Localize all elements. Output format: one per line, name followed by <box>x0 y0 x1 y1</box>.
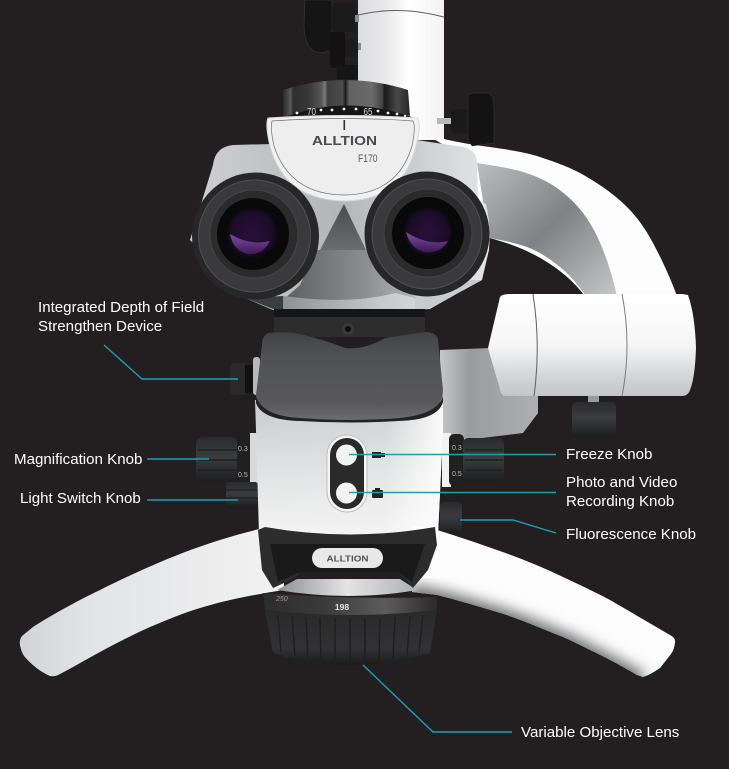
lower centre shading <box>283 250 420 300</box>
right magnification knob: 0.5 <box>452 471 462 478</box>
lens seat disc <box>277 579 417 596</box>
right magnification knob <box>442 433 504 487</box>
head foot <box>283 293 415 311</box>
clamp badge <box>312 548 383 568</box>
camera icon <box>372 488 383 498</box>
centre wedge <box>320 204 366 250</box>
curved arm <box>430 137 677 296</box>
callout: Magnification Knob: Magnification Knob <box>14 451 142 468</box>
rotating dial: 65 <box>364 107 373 118</box>
callout: Variable Objective Lens <box>363 665 679 741</box>
callout: Freeze Knob: Freeze Knob <box>566 446 652 463</box>
callout: Variable Objective Lens: Variable Objective Lens <box>521 724 679 741</box>
depth of field knob <box>230 357 260 395</box>
button capsule <box>327 435 367 512</box>
freeze icon <box>372 452 385 458</box>
callout: Photo and Video Recording Knob <box>349 474 677 510</box>
left magnification knob: 0.3 <box>238 446 248 453</box>
left shadow foot <box>245 296 283 309</box>
objective lens <box>263 593 437 665</box>
upper arm column <box>358 0 444 140</box>
callout: Fluorescence Knob: Fluorescence Knob <box>566 526 696 543</box>
clamp badge: ALLTION <box>326 554 369 564</box>
right magnification knob: 0.3 <box>452 445 462 452</box>
inner shaded face <box>477 163 617 296</box>
freeze button <box>336 444 357 466</box>
label plate: ALLTION <box>312 134 377 148</box>
right eyepiece <box>364 172 490 296</box>
binocular head housing <box>190 140 490 311</box>
label plate <box>267 116 419 201</box>
right foot <box>415 280 482 310</box>
callout: Integrated Depth of Field Strengthen Device: Strengthen Device <box>38 318 162 335</box>
callout: Integrated Depth of Field Strengthen Device: Integrated Depth of Field <box>38 299 204 316</box>
rotating dial <box>281 80 417 119</box>
left eyepiece <box>192 172 319 300</box>
callout: Integrated Depth of Field Strengthen Device <box>38 299 238 379</box>
callout: Fluorescence Knob <box>460 520 696 543</box>
callout: Photo and Video Recording Knob: Recording Knob <box>566 493 674 510</box>
left support arm <box>20 527 284 676</box>
objective lens: 250 <box>275 596 288 603</box>
callout: Light Switch Knob: Light Switch Knob <box>20 490 141 507</box>
objective lens: 198 <box>335 602 349 612</box>
right support arm <box>410 525 675 684</box>
top locking knobs <box>304 0 361 79</box>
side knob with pin <box>437 93 494 146</box>
grey upper body <box>256 332 443 422</box>
left magnification knob: 0.5 <box>238 472 248 479</box>
neck collar <box>274 309 425 337</box>
rotating dial: 70 <box>307 107 316 118</box>
clamp band <box>258 527 437 596</box>
focus knob under cylinder <box>572 396 616 437</box>
illuminator cylinder <box>488 294 696 396</box>
callout: Photo and Video Recording Knob: Photo and Video <box>566 474 677 491</box>
left light switch knob <box>226 482 258 508</box>
left magnification knob <box>196 433 258 487</box>
label plate: F170 <box>358 153 378 165</box>
photo button <box>336 482 357 504</box>
white main body <box>255 400 443 535</box>
fluorescence knob <box>440 502 462 534</box>
illuminator block <box>440 348 538 442</box>
